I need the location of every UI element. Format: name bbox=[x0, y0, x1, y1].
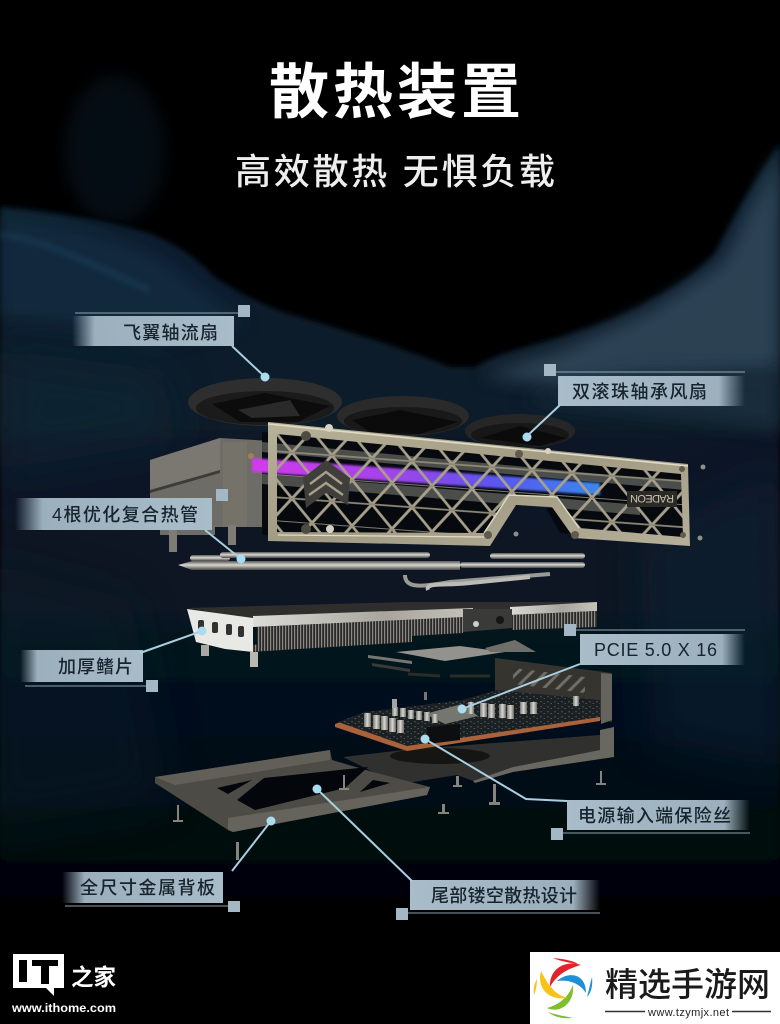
RADEON badge bbox=[627, 491, 677, 507]
backplate cutout large bbox=[237, 767, 368, 810]
logo: IT之家 bbox=[11, 954, 116, 1015]
callout: 尾部镂空散热设计: 尾部镂空散热设计 bbox=[431, 886, 577, 906]
icon: colourful swirl bbox=[534, 958, 592, 1018]
callout: 尾部镂空散热设计 bbox=[312, 784, 600, 920]
watermark logo: 精选手游网: 精选手游网 bbox=[605, 966, 770, 1003]
subtitle: 高效散热 无惧负载 bbox=[235, 151, 555, 192]
callout: PCIE 5.0 X 16 bbox=[458, 624, 745, 714]
thermal pads and small parts bbox=[368, 640, 536, 700]
callout: 电源输入端保险丝 bbox=[420, 734, 750, 840]
callout: 飞翼轴流扇: 飞翼轴流扇 bbox=[123, 323, 218, 343]
callout: 加厚鳍片: 加厚鳍片 bbox=[58, 657, 133, 677]
side shroud box bbox=[150, 438, 272, 552]
backplate cutout right bbox=[360, 780, 390, 792]
heatsink fins bbox=[187, 602, 597, 667]
RGB light strip bbox=[252, 458, 600, 495]
callout: 加厚鳍片 bbox=[20, 626, 206, 692]
shroud inner grey bars bbox=[262, 442, 685, 515]
shroud interior bbox=[262, 432, 685, 540]
logo: IT之家: 之家 bbox=[71, 964, 116, 990]
callout: 全尺寸金属背板 bbox=[62, 816, 276, 912]
watermark logo: 精选手游网: www.tzymjx.net bbox=[647, 1007, 729, 1019]
heat pipes bbox=[178, 552, 585, 590]
plate surface bbox=[343, 735, 600, 783]
title: 散热装置 bbox=[269, 59, 521, 126]
logo: IT之家: www.ithome.com bbox=[11, 1001, 116, 1015]
RADEON badge: RADEON bbox=[630, 492, 674, 504]
icon: fan 2 bbox=[337, 396, 469, 436]
callout: 电源输入端保险丝: 电源输入端保险丝 bbox=[578, 806, 731, 826]
IO bracket bbox=[495, 658, 612, 724]
callout: 双滚珠轴承风扇 bbox=[522, 364, 745, 442]
callout: 全尺寸金属背板: 全尺寸金属背板 bbox=[80, 877, 215, 898]
icon: fan 1 bbox=[188, 378, 342, 426]
callout: PCIE 5.0 X 16: PCIE 5.0 X 16 bbox=[594, 640, 717, 660]
exploded graphics card bbox=[150, 378, 706, 860]
callout: 双滚珠轴承风扇: 双滚珠轴承风扇 bbox=[572, 382, 707, 402]
icon: fan 3 bbox=[465, 414, 575, 448]
backplate cutout left bbox=[217, 780, 252, 794]
metal shroud lattice bbox=[268, 422, 706, 546]
icon: shroud emblem bbox=[303, 460, 350, 508]
left frame bbox=[155, 750, 430, 832]
fans bbox=[188, 378, 575, 448]
callout: 4根优化复合热管: 4根优化复合热管 bbox=[52, 505, 198, 525]
callout: 4根优化复合热管 bbox=[15, 489, 246, 564]
backplate bbox=[155, 727, 614, 860]
PCB bbox=[335, 690, 600, 751]
watermark logo: 精选手游网 bbox=[530, 952, 780, 1024]
callout: 飞翼轴流扇 bbox=[72, 305, 270, 382]
